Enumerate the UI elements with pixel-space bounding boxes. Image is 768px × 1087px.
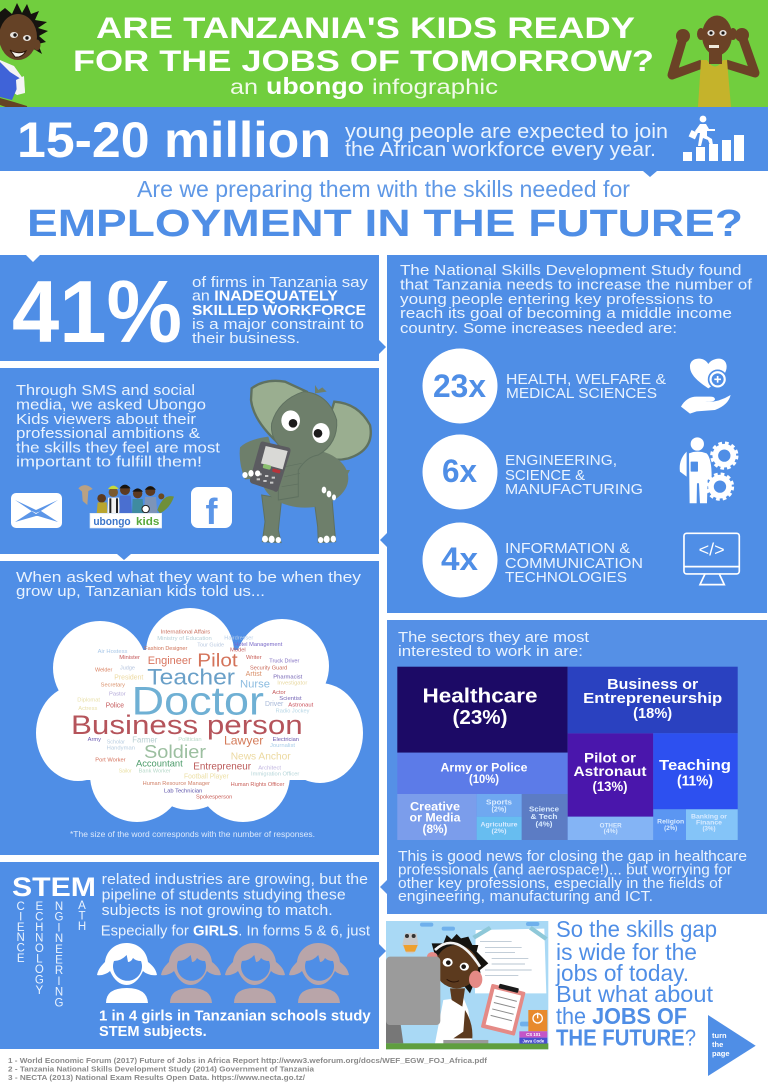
word cloud: Farmer — [132, 736, 158, 745]
panel: green title header — [0, 0, 768, 114]
survey text: the skills they feel are most — [16, 440, 221, 456]
row: 23x health — [422, 348, 666, 424]
tile: creative or media: (8%) — [422, 824, 448, 836]
girls stat caption: STEM subjects. — [99, 1023, 207, 1040]
illustration: girl coding at computer: CS 101 — [526, 1032, 541, 1037]
word cloud: News Anchor — [231, 750, 291, 762]
word cloud: Artist — [246, 671, 262, 678]
closing question text: THE FUTURE? — [556, 1025, 696, 1051]
word cloud: Army — [88, 737, 101, 743]
sectors conclusion text — [398, 848, 747, 905]
STEM heading: STEM — [12, 872, 96, 902]
heading: employment in the future: Are we preparing them with the skills needed for — [137, 176, 630, 202]
word cloud: Teacher — [147, 664, 235, 689]
row: 6x engineering: ENGINEERING, — [505, 452, 617, 469]
word cloud: Actress — [78, 706, 98, 712]
word cloud: Soldier — [144, 742, 206, 762]
word cloud: Tour Guide — [197, 642, 224, 648]
tile: science and tech: & Tech — [530, 812, 558, 821]
closing question text: So the skills gap — [556, 916, 717, 942]
word cloud: Lab Technician — [164, 788, 202, 794]
title — [73, 12, 654, 78]
icon: girl muted 2 — [161, 943, 221, 1003]
word cloud: Port Worker — [95, 758, 126, 764]
STEM acronym letters: E — [17, 953, 25, 965]
icon row: one in four girls — [97, 943, 349, 1003]
word cloud: Hairdresser — [224, 636, 253, 642]
tile: other: (4%) — [604, 829, 618, 835]
word cloud: Writer — [246, 655, 262, 661]
icon: person climbing bars — [683, 116, 744, 161]
statement text: the African workforce every year. — [345, 138, 656, 161]
icon: girl muted 4 — [289, 943, 349, 1003]
stat description: of firms in Tanzania say — [192, 274, 369, 291]
word cloud: Accountant — [136, 758, 183, 769]
icon: computer monitor with code — [684, 533, 739, 585]
icon: heart in hand — [681, 359, 731, 414]
word cloud: Secretary — [101, 683, 125, 689]
STEM acronym letters: I — [57, 922, 61, 934]
word cloud: Hotel Management — [234, 642, 283, 648]
icon: computer monitor with code: </> — [699, 540, 725, 560]
word cloud: Investigator — [277, 680, 307, 686]
word cloud: Scholar — [107, 739, 125, 745]
tile: healthcare: Healthcare — [422, 686, 538, 708]
word cloud: Architect — [258, 765, 281, 771]
STEM acronym letters: H — [35, 922, 43, 934]
tile: teaching: Teaching — [659, 757, 731, 774]
panel: sectors of interest — [380, 620, 767, 914]
STEM acronym letters: O — [35, 943, 44, 955]
STEM description: Especially for GIRLS. In forms 5 & 6, just — [101, 923, 371, 940]
sectors intro text — [398, 629, 590, 660]
row: 6x engineering: MANUFACTURING — [505, 481, 643, 498]
word cloud: Entrepreneur — [193, 761, 252, 772]
closing question text: But what about — [556, 981, 714, 1007]
icon: boy character with spiky hair — [0, 3, 48, 114]
word cloud: Football Player — [184, 774, 229, 781]
row: 23x health: MEDICAL SCIENCES — [506, 385, 657, 402]
panel: 41 percent of firms — [0, 255, 386, 361]
icon: elephant with mobile phone — [240, 381, 371, 543]
statement text — [345, 120, 668, 161]
word cloud: Air Hostess — [98, 649, 128, 655]
panel: SMS and social media survey — [0, 368, 379, 560]
stat description: an INADEQUATELY — [192, 288, 338, 304]
STEM acronym letters: C — [17, 901, 25, 913]
closing question text: the JOBS OF — [556, 1003, 687, 1029]
sectors intro text: The sectors they are most — [398, 629, 590, 646]
word cloud: Fashion Designer — [144, 646, 187, 652]
icon: facebook: f — [206, 491, 218, 532]
panel intro text — [16, 569, 362, 600]
closing question text: jobs of today. — [555, 960, 689, 986]
sectors conclusion text: professionals (and aerospace!)... but worrying for — [398, 862, 732, 878]
STEM acronym letters: Y — [35, 985, 43, 997]
word cloud — [71, 630, 314, 800]
subtitle: an ubongo infographic: ubongo — [266, 73, 364, 99]
study intro text: young people entering key professions to — [400, 291, 713, 308]
tile: religion: Religion — [657, 819, 685, 825]
word cloud: Ministry of Education — [157, 636, 212, 642]
STEM description: pipeline of students studying these — [102, 886, 346, 904]
row: 4x ICT: INFORMATION & — [505, 540, 630, 557]
tile: sports — [477, 794, 522, 817]
closing question text: is wide for the — [556, 939, 697, 965]
STEM acronym letters: L — [36, 954, 43, 966]
closing question text — [555, 916, 717, 1051]
icon: girl highlighted — [97, 943, 157, 1003]
survey text: professional ambitions & — [16, 425, 200, 442]
word cloud: Human Rights Officer — [231, 782, 285, 788]
word cloud: Bank Worker — [139, 769, 171, 775]
tile: banking or finance: (3%) — [702, 827, 716, 833]
word cloud: Welder — [95, 667, 112, 673]
sectors conclusion text: other key professions, especially in the fields of — [398, 875, 723, 892]
big number: 15-20 million — [17, 112, 331, 168]
survey text: Through SMS and social — [16, 382, 195, 399]
subtitle: an ubongo infographic: infographic — [372, 76, 498, 99]
tile: creative or media — [397, 794, 477, 840]
word cloud: Engineer — [148, 655, 192, 667]
STEM acronym letters: E — [17, 922, 25, 934]
girls stat caption — [99, 1008, 371, 1040]
tile: teaching: (11%) — [677, 773, 713, 790]
STEM acronym letters: I — [19, 911, 22, 923]
survey text: Kids viewers about their — [16, 411, 196, 428]
arrow: turn the page: page — [712, 1049, 730, 1058]
tile: business or entrepreneurship: Business or — [607, 677, 699, 693]
word cloud: Police — [106, 703, 124, 710]
logo: ubongo kids group — [78, 485, 174, 528]
tile: healthcare — [397, 667, 568, 753]
STEM acronym letters: N — [35, 932, 43, 944]
illustration: girl coding at computer: Java Code — [522, 1038, 545, 1043]
word cloud: Diplomat — [77, 698, 100, 704]
cloud shape — [36, 608, 363, 822]
row: 6x engineering: 6x — [442, 453, 477, 489]
study intro text: reach its goal of becoming a middle income — [400, 305, 732, 322]
word cloud: Journalist — [270, 743, 295, 749]
word cloud: Handyman — [107, 746, 135, 752]
word cloud: Nurse — [240, 679, 270, 691]
STEM acronym letters: N — [55, 901, 63, 913]
tile: banking or finance — [686, 809, 738, 840]
word cloud: Immigration Officer — [251, 771, 299, 777]
stat description — [192, 274, 369, 347]
logo: ubongo kids group: kids — [136, 516, 159, 528]
arrow: turn the page: the — [712, 1040, 723, 1049]
STEM acronym letters: G — [55, 997, 64, 1009]
word cloud: Radio Jockey — [276, 709, 310, 715]
STEM acronym letters — [17, 900, 86, 1009]
word cloud: Truck Driver — [269, 658, 299, 664]
tile: other: OTHER — [600, 823, 622, 829]
word cloud: Electrician — [273, 737, 299, 743]
STEM acronym letters: N — [17, 932, 25, 944]
footnotes: 1 - World Economic Forum (2017) Future of Jobs in Africa Report http://www3.weforum.org/docs/WEF_EGW_FOJ_Africa.pdf — [8, 1056, 488, 1065]
STEM acronym letters: C — [17, 943, 25, 955]
tile: pilot or astronaut: Astronaut — [574, 763, 647, 779]
survey text: important to fulfill them! — [16, 454, 202, 470]
row: 23x health: HEALTH, WELFARE & — [506, 371, 666, 388]
row: 23x health: 23x — [433, 368, 486, 404]
word cloud footnote: *The size of the word corresponds with the number of responses. — [70, 830, 315, 839]
STEM description — [101, 871, 371, 940]
treemap chart — [397, 667, 738, 840]
word cloud: Security Guard — [250, 666, 287, 672]
tile: science and tech: (4%) — [536, 820, 553, 829]
icon: girl muted 3 — [225, 943, 285, 1003]
STEM acronym letters: G — [35, 974, 44, 986]
STEM description: related industries are growing, but the — [102, 871, 368, 888]
heading: employment in the future — [27, 176, 743, 245]
row: 4x ICT: TECHNOLOGIES — [505, 569, 627, 586]
panel intro text: When asked what they want to be when they — [16, 569, 362, 586]
stat description: SKILLED WORKFORCE — [192, 302, 366, 319]
icon: envelope — [11, 493, 62, 528]
tile: army or police: Army or Police — [440, 763, 528, 775]
STEM acronym letters: R — [55, 965, 63, 977]
row: 4x ICT — [422, 522, 643, 598]
tile: agriculture — [477, 817, 522, 840]
word cloud: Scientist — [279, 696, 302, 702]
panel: national skills development study — [380, 255, 767, 613]
study intro text — [400, 262, 753, 337]
panel: word cloud of ambitions — [0, 561, 379, 855]
STEM acronym letters: H — [78, 921, 86, 933]
tile: banking or finance: Finance — [696, 820, 723, 826]
word cloud: President — [114, 674, 143, 681]
tile: creative or media: Creative — [410, 802, 460, 814]
tile: army or police — [397, 753, 568, 794]
word cloud: Model — [230, 648, 246, 654]
word cloud: Pastor — [109, 692, 126, 698]
tile: sports: (2%) — [492, 807, 506, 814]
word cloud: Doctor — [132, 679, 264, 723]
tile: banking or finance: Banking or — [691, 814, 728, 820]
tile: sports: Sports — [486, 800, 512, 806]
word cloud: Judge — [120, 666, 135, 672]
tile: other — [568, 817, 653, 840]
icon: man flexing in yellow vest — [672, 16, 755, 107]
heading: employment in the future: EMPLOYMENT IN THE FUTURE? — [27, 203, 743, 245]
footnotes: 3 - NECTA (2013) National Exam Results Open Data. https://www.necta.go.tz/ — [8, 1073, 306, 1082]
arrow: turn the page — [708, 1015, 756, 1076]
study intro text: country. Some increases needed are: — [400, 320, 677, 337]
survey text: media, we asked Ubongo — [16, 396, 206, 414]
STEM acronym letters: N — [55, 987, 63, 999]
tile: pilot or astronaut — [568, 733, 653, 817]
tile: agriculture: Agriculture — [480, 822, 518, 829]
tile: creative or media: or Media — [410, 813, 461, 825]
STEM acronym letters: G — [55, 912, 64, 924]
tile: business or entrepreneurship — [568, 667, 738, 733]
tile: pilot or astronaut: Pilot or — [584, 749, 637, 765]
tile: army or police: (10%) — [469, 774, 499, 786]
tile: healthcare: (23%) — [452, 707, 508, 729]
tile: teaching — [653, 733, 738, 809]
word cloud: Actor — [272, 690, 286, 696]
panel: 15-20 million band — [0, 107, 768, 177]
STEM description: subjects is not growing to match. — [102, 902, 333, 919]
STEM acronym letters: A — [78, 900, 86, 912]
big stat: 41% — [12, 262, 182, 361]
tile: religion — [653, 809, 686, 840]
tile: business or entrepreneurship: (18%) — [633, 706, 672, 722]
STEM acronym letters: E — [55, 944, 63, 956]
tile: religion: (2%) — [664, 826, 677, 832]
sectors conclusion text: engineering, manufacturing and ICT. — [398, 888, 653, 905]
STEM acronym letters: E — [35, 901, 43, 913]
sectors intro text: interested to work in are: — [398, 643, 583, 660]
panel intro text: grow up, Tanzanian kids told us... — [16, 583, 265, 600]
tile: science and tech: Science — [529, 805, 559, 814]
row: 4x ICT: 4x — [441, 541, 478, 577]
panel: STEM — [0, 862, 386, 1049]
study intro text: that Tanzania needs to increase the number of — [400, 276, 753, 294]
row: 6x engineering: SCIENCE & — [505, 467, 585, 484]
title: FOR THE JOBS OF TOMORROW? — [73, 45, 654, 78]
girls stat caption: 1 in 4 girls in Tanzanian schools study — [99, 1008, 371, 1025]
word cloud: Human Resource Manager — [143, 781, 210, 787]
survey text — [16, 382, 221, 470]
tile: business or entrepreneurship: Entrepreneurship — [583, 691, 722, 707]
tile: pilot or astronaut: (13%) — [592, 778, 628, 794]
word cloud: Business person — [71, 710, 303, 740]
word cloud: Lawyer — [224, 733, 263, 747]
footnotes — [8, 1056, 488, 1082]
tile: agriculture: (2%) — [492, 828, 506, 835]
STEM acronym letters: O — [35, 964, 44, 976]
icon: engineer with gears — [680, 437, 737, 503]
sectors conclusion text: This is good news for closing the gap in healthcare — [398, 848, 747, 865]
subtitle: an ubongo infographic: an — [230, 76, 258, 99]
stat description: their business. — [192, 330, 300, 347]
word cloud: Astronaut — [288, 703, 314, 709]
tile: science and tech — [522, 794, 568, 840]
word cloud: Driver — [265, 701, 284, 708]
logo: ubongo kids group: ubongo — [93, 516, 131, 528]
STEM acronym letters: I — [57, 976, 61, 988]
arrow: turn the page: turn — [712, 1031, 727, 1040]
word cloud: Pharmacist — [273, 675, 303, 681]
title: ARE TANZANIA'S KIDS READY — [96, 12, 635, 45]
stat description: is a major constraint to — [192, 316, 364, 333]
word cloud: Pilot — [197, 651, 238, 671]
word cloud: Politician — [178, 737, 202, 743]
word cloud: Spokesperson — [196, 794, 232, 800]
statement text: young people are expected to join — [345, 120, 668, 143]
STEM acronym letters: N — [55, 933, 63, 945]
word cloud: Minister — [119, 655, 140, 661]
study intro text: The National Skills Development Study found — [400, 262, 742, 279]
icon: facebook — [191, 487, 232, 532]
word cloud: International Affairs — [161, 630, 210, 636]
footnotes: 2 - Tanzania National Skills Development Study (2014) Government of Tanzania — [8, 1065, 315, 1074]
STEM acronym letters: C — [35, 912, 43, 924]
STEM acronym letters: T — [78, 910, 86, 922]
row: 6x engineering — [422, 434, 643, 510]
word cloud: Sailor — [119, 769, 132, 775]
row: 4x ICT: COMMUNICATION — [505, 555, 643, 572]
STEM acronym letters: E — [55, 954, 63, 966]
subtitle: an ubongo infographic — [230, 73, 498, 99]
illustration: girl coding at computer — [386, 921, 548, 1049]
